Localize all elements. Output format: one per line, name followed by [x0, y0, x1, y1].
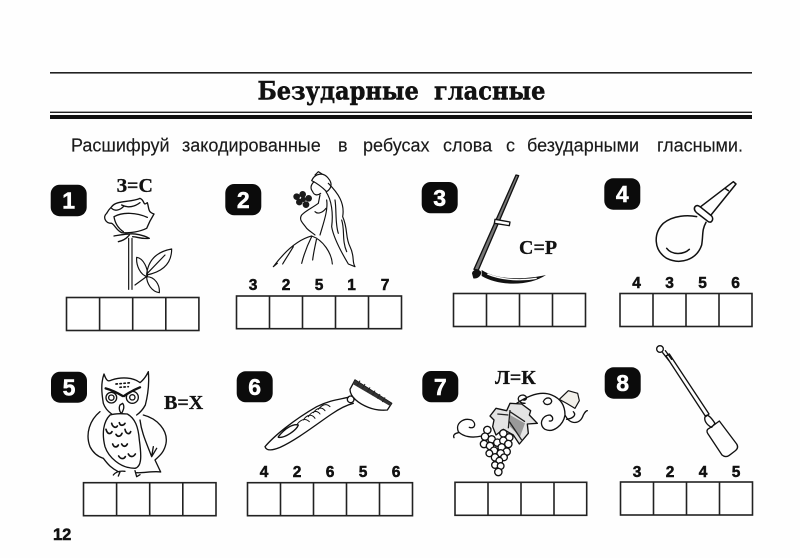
digit labels 2: 1 — [347, 277, 356, 294]
icon: rubber bulb — [656, 182, 736, 261]
answer grid 4 — [620, 294, 752, 326]
answer grid 3 — [454, 294, 586, 326]
answer grid 2 — [236, 296, 402, 329]
badge 3: 3 — [433, 185, 446, 211]
letter rule 1: З=С — [116, 175, 153, 197]
badge 2 — [225, 184, 261, 215]
instruction text: слова — [443, 136, 493, 156]
instruction text: безударными — [527, 136, 639, 156]
digit labels 4 — [632, 275, 740, 292]
digit labels 2: 5 — [315, 277, 324, 294]
instruction text: ребусах — [363, 136, 430, 156]
instruction text: с — [506, 136, 515, 156]
digit labels 4: 5 — [698, 275, 707, 292]
page number: 12 — [53, 526, 71, 544]
letter rule 3: С=Р — [519, 237, 557, 259]
digit labels 8: 4 — [699, 464, 708, 481]
header rules and title — [50, 72, 752, 119]
letter rule 7: Л=К — [495, 367, 536, 389]
digit labels 2: 3 — [249, 277, 258, 294]
badge 6 — [237, 371, 273, 402]
badge 7 — [422, 371, 458, 402]
title: Безударные гласные — [258, 76, 546, 106]
digit labels 6: 5 — [359, 464, 368, 481]
digit labels 2: 2 — [282, 277, 290, 294]
badge 4 — [604, 178, 640, 210]
puzzle 2: bride — [225, 172, 402, 329]
digit labels 8: 3 — [633, 464, 642, 481]
puzzle 1: rose — [51, 175, 199, 330]
badge 7: 7 — [434, 374, 447, 400]
digit labels 2: 7 — [381, 277, 389, 294]
digit labels 4: 6 — [731, 275, 740, 292]
badge 3 — [422, 182, 458, 213]
instruction text: закодированные — [182, 136, 321, 156]
instruction text: в — [338, 136, 348, 156]
icon: razor — [265, 380, 392, 450]
badge 8: 8 — [616, 370, 629, 396]
instruction text: гласными. — [657, 136, 743, 156]
badge 1 — [51, 185, 87, 216]
digit labels 8 — [633, 464, 741, 481]
puzzle 3: scythe — [422, 175, 586, 326]
instruction text: Расшифруй — [71, 136, 170, 156]
letter rule 5: В=Х — [164, 392, 204, 414]
icon: scythe — [472, 175, 546, 284]
badge 4: 4 — [616, 181, 629, 207]
puzzle 8: oar — [605, 346, 752, 515]
icon: owl — [88, 372, 166, 477]
badge 2: 2 — [237, 187, 250, 213]
icon: bride — [273, 172, 355, 267]
answer grid 7 — [455, 482, 587, 515]
digit labels 6: 6 — [392, 464, 401, 481]
icon: oar — [657, 346, 738, 457]
digit labels 6: 2 — [293, 464, 301, 481]
badge 5 — [51, 372, 87, 403]
digit labels 8: 5 — [732, 464, 741, 481]
puzzle 5: owl — [51, 372, 216, 516]
answer grid 6 — [248, 483, 412, 516]
digit labels 6 — [260, 464, 401, 481]
puzzle 7: grapes — [422, 367, 587, 515]
digit labels 2 — [249, 277, 389, 294]
answer grid 5 — [84, 483, 216, 516]
badge 8 — [605, 367, 641, 399]
puzzle 6: razor — [237, 371, 412, 516]
answer grid 8 — [620, 482, 752, 515]
digit labels 4: 4 — [632, 275, 641, 292]
digit labels 6: 4 — [260, 464, 269, 481]
badge 5: 5 — [63, 374, 76, 400]
badge 6: 6 — [248, 374, 261, 400]
digit labels 8: 2 — [666, 464, 674, 481]
digit labels 4: 3 — [665, 275, 674, 292]
icon: grape vine — [454, 391, 587, 476]
puzzle 4: rubber bulb — [604, 178, 752, 326]
icon: rose — [105, 198, 172, 293]
answer grid 1 — [66, 298, 199, 330]
badge 1: 1 — [62, 188, 75, 214]
digit labels 6: 6 — [326, 464, 335, 481]
